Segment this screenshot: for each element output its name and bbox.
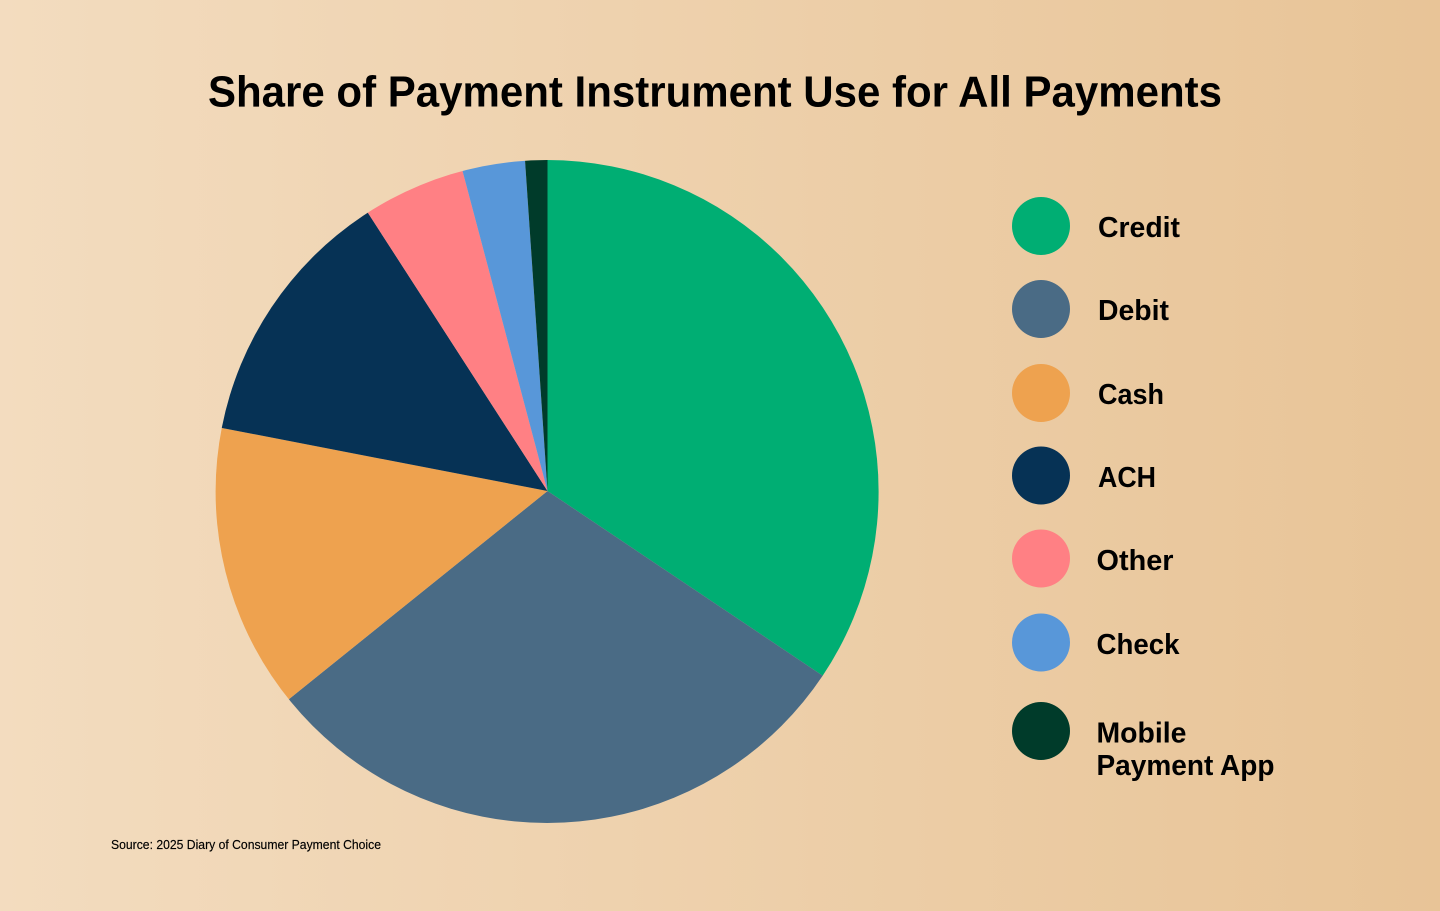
slice: ACH — [222, 212, 548, 491]
legend item: Check: Check — [1096, 629, 1180, 661]
legend item: Mobile Payment App: Mobile — [1096, 718, 1186, 750]
source note: Source: 2025 Diary of Consumer Payment Choice — [111, 838, 381, 852]
slice: Credit — [548, 160, 879, 676]
legend item: Other: Other — [1096, 545, 1174, 577]
title: Share of Payment Instrument Use for All Payments — [208, 68, 1222, 116]
legend — [1012, 197, 1274, 782]
slice: Mobile Payment App — [525, 160, 548, 490]
slice: Cash — [216, 428, 548, 700]
legend item: Cash — [1012, 364, 1164, 422]
legend item: Credit — [1012, 197, 1180, 255]
legend item: Mobile Payment App: Payment App — [1096, 750, 1274, 782]
legend item: Mobile Payment App — [1012, 702, 1274, 782]
legend item: ACH: ACH — [1098, 462, 1156, 494]
pie chart — [216, 160, 879, 823]
legend item: Debit — [1012, 280, 1169, 338]
legend item: Credit: Credit — [1098, 212, 1180, 244]
slice: Other — [368, 171, 548, 491]
slice: Check — [462, 160, 548, 490]
legend item: Check — [1012, 614, 1180, 672]
legend item: ACH — [1012, 446, 1156, 504]
legend item: Cash: Cash — [1098, 379, 1164, 411]
legend item: Debit: Debit — [1098, 295, 1169, 327]
legend item: Other — [1012, 530, 1174, 588]
slice: Debit — [288, 491, 823, 823]
